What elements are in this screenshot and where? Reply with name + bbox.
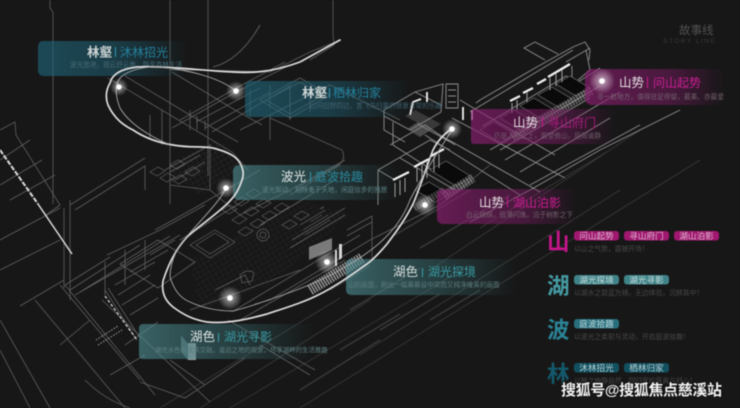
label panel: 林壑 沐林招光: 波光激滟，观云舒云卷，静享森林生活	[70, 60, 182, 69]
label panel: 波光 庭波拾趣: 庭波拾趣	[315, 169, 363, 184]
legend: 山: 问山起势	[579, 230, 614, 241]
heading: story line	[663, 23, 716, 45]
label panel: 湖色 湖光寻影: 湖光寻影	[224, 329, 272, 344]
right long terrace building	[378, 42, 680, 222]
legend: 林: 林	[547, 362, 570, 387]
legend: 山: 寻山府门	[629, 230, 664, 241]
faint arc near top	[213, 25, 260, 67]
detailed courtyard pattern	[150, 160, 330, 310]
label panel: 林壑 沐林招光	[38, 41, 188, 76]
label panel: 林壑 沐林招光: 沐林招光	[120, 46, 168, 60]
bottom right faint road lines	[160, 130, 700, 408]
label panel: 湖色 湖光寻影	[139, 324, 328, 359]
label panel: 山势 寻山府门	[471, 109, 616, 144]
legend: 林: 以林之幽静自然，回归家的最真与舒心！	[574, 376, 696, 385]
legend: 林: 沐林招光	[579, 362, 614, 373]
legend: 波	[547, 318, 690, 343]
watermark: 搜狐号@搜狐焦点慈溪站	[561, 381, 722, 399]
label panel: 波光 庭波拾趣: 波光	[281, 170, 306, 184]
label panel: 林壑 栖林归家: 林壑	[302, 85, 328, 100]
label panel: 山势 湖山泊影: 山势	[479, 195, 505, 210]
label panel: 湖色 湖光探境: 湖光探境	[428, 264, 476, 279]
label panel: 山势 湖山泊影	[437, 189, 577, 224]
heading: story line: 故事线	[679, 23, 714, 37]
label panel: 山势 寻山府门: 仍是入府之上，展望倚山，庭阁谧静	[494, 131, 601, 140]
label panel: 湖色 湖光寻影: 湖色	[190, 329, 216, 344]
label panel: 波光 庭波拾趣: 波光粼动，相映重于天地，闲庭信步的雅居	[262, 185, 388, 194]
label panel: 山势 寻山府门: 山势	[513, 115, 539, 130]
label panel: 山势 问山起势: 问山起势	[653, 76, 701, 90]
label panel: 山势 问山起势	[585, 69, 725, 105]
legend: 湖: 湖光探境	[579, 274, 614, 285]
legend: 山: 山	[547, 230, 570, 255]
heading: story line: STORY LINE	[663, 38, 716, 45]
label panel: 山势 湖山泊影: 湖山泊影	[513, 195, 561, 210]
label panel: 湖色 湖光探境: 山的画面，刷出一幅幕幕设中突而又纯净唯美的画面	[348, 280, 500, 289]
label panel: 波光 庭波拾趣	[233, 165, 398, 200]
story line curve	[106, 40, 453, 323]
legend: 波: 波	[547, 318, 570, 343]
dense courtyard texture	[190, 200, 350, 310]
site plan wireframe: left and centre buildings	[0, 0, 490, 408]
label panel: 山势 问山起势: 山势	[619, 75, 645, 90]
label panel: 林壑 栖林归家: 山间田野四边，置飞鸟归巢的惬意日常的乐趣	[310, 101, 442, 110]
glowing story nodes	[110, 68, 615, 310]
label panel: 林壑 沐林招光: 林壑	[87, 44, 113, 60]
legend: 湖: 以湖水之碧蓝为镜，无边体验，沉醉其中！	[574, 288, 703, 297]
label panel: 湖色 湖光探境	[346, 259, 516, 295]
legend: 波: 以波光之柔软与灵动，开启庭波拾趣！	[574, 332, 690, 341]
legend: 山: 以山之气势，震撼开场！	[574, 244, 649, 253]
legend: 山	[547, 230, 719, 255]
label panel: 山势 寻山府门: 寻山府门	[548, 115, 596, 130]
label panel: 湖色 湖光寻影: 湖光水色与建筑交融，遥远之地的观景，尽享湖畔的生活雅趣	[155, 345, 328, 354]
legend: 波: 庭波拾趣	[579, 318, 614, 329]
label panel: 山势 湖山泊影: 白云绵绵，低薄闪逸，沿于树影之下	[466, 210, 573, 219]
white terrace highlights and bright stair rows	[181, 64, 592, 360]
legend: 湖	[547, 274, 703, 299]
dark rooms between terraces	[415, 76, 590, 202]
legend: 山: 湖山泊影	[679, 231, 714, 241]
label panel: 林壑 栖林归家: 栖林归家	[333, 85, 381, 100]
legend: 湖: 湖	[547, 274, 570, 299]
legend: 林: 栖林归家	[629, 362, 664, 373]
label panel: 山势 问山起势: 寻一处地方，值得驻足停留，最美、亦最爱	[597, 92, 724, 101]
label panel: 湖色 湖光探境: 湖色	[393, 264, 419, 279]
label panel: 林壑 栖林归家	[245, 81, 442, 117]
left diagonal building strip	[0, 150, 137, 345]
legend: 湖: 湖光寻影	[629, 274, 664, 285]
legend: 林	[547, 362, 696, 387]
